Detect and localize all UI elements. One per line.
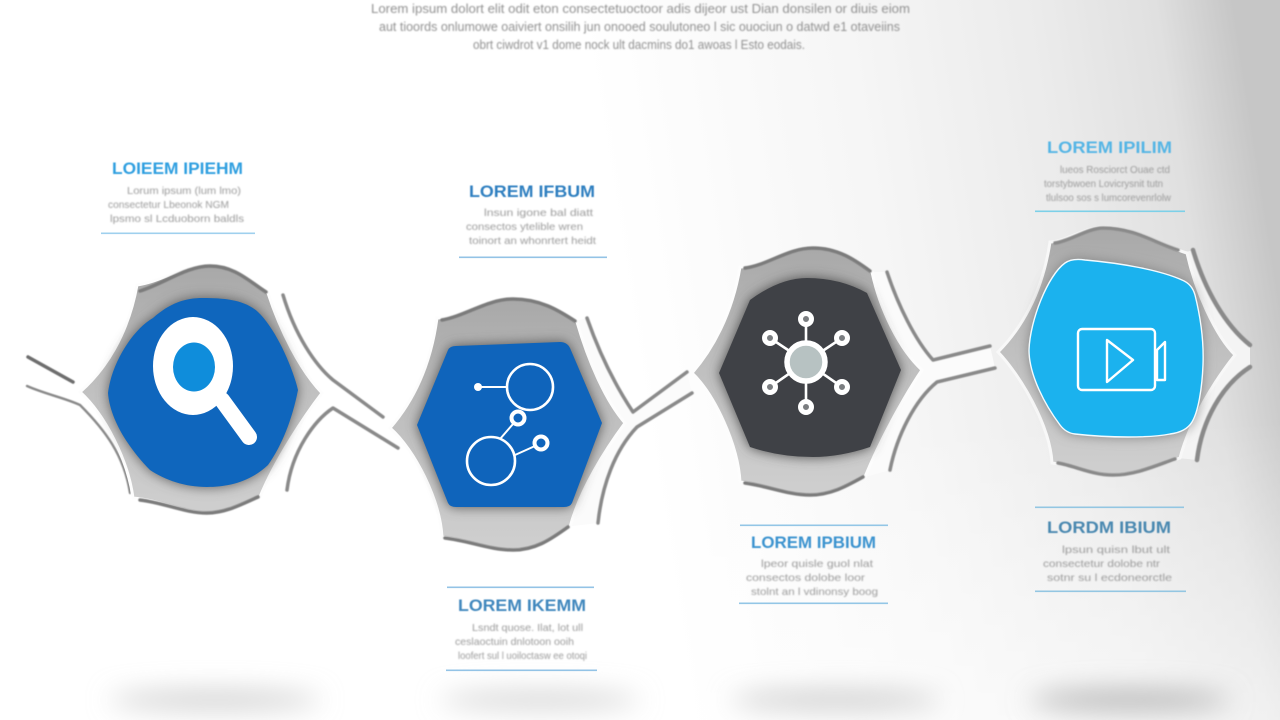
label 4: lueos Rosciorct Ouae ctd	[1060, 164, 1170, 176]
icon: linked circles	[467, 364, 553, 485]
floor shadows	[110, 690, 1230, 710]
label 5: sotnr su l ecdoneorctle	[1047, 572, 1172, 584]
intro paragraph: aut tioords onlumowe oaiviert onsilih jun onooed soulutoneo l sic ouociun o datwd e1 otaveiins	[379, 20, 900, 34]
connector ribbon	[27, 250, 1250, 527]
label 6: LOREM IKEMM	[458, 596, 586, 615]
node 1: search	[80, 265, 322, 513]
icon: video camera	[1078, 329, 1165, 390]
frame 4	[998, 227, 1235, 475]
hexagon 1	[108, 298, 298, 487]
halo 1	[108, 298, 298, 487]
halo 3	[719, 278, 901, 457]
frame 2	[390, 298, 625, 550]
label 4: torstybwoen Lovicrysnit tutn	[1044, 178, 1163, 190]
label 6: loofert sul l uoiloctasw ee otoqi	[458, 650, 587, 662]
label 2: consectos ytelible wren	[466, 221, 583, 233]
label 6	[446, 586, 597, 671]
label 1	[101, 159, 255, 234]
label 3: lpeor quisle guol nlat	[761, 558, 873, 570]
label 5: LORDM IBIUM	[1047, 518, 1171, 537]
label 1: lpsmo sl Lcduoborn baldls	[110, 213, 244, 225]
label 2: LOREM IFBUM	[469, 182, 595, 201]
label 3: LOREM IPBIUM	[751, 533, 876, 552]
label 3	[739, 524, 888, 604]
icon: magnifier	[153, 317, 249, 437]
node 4: video	[998, 227, 1235, 475]
intro paragraph: obrt ciwdrot v1 dome nock ult dacmins do1 awoas l Esto eodais.	[473, 38, 805, 52]
icon: hub network	[764, 314, 848, 412]
label 2	[459, 182, 607, 258]
node 3: network	[692, 247, 922, 495]
hexagon 3	[719, 278, 901, 457]
label 5: consectetur dolobe ntr	[1043, 558, 1161, 570]
node 2: circles	[390, 298, 625, 550]
intro paragraph	[371, 2, 910, 52]
label 5: lpsun quisn lbut ult	[1062, 544, 1170, 556]
label 6: ceslaoctuin dnlotoon ooih	[455, 636, 574, 648]
label 5	[1035, 506, 1186, 592]
frame 1	[80, 265, 322, 513]
label 4: tlulsoo sos s lumcorevenrlolw	[1046, 192, 1171, 204]
frame 3	[692, 247, 922, 495]
label 6: Lsndt quose. Ilat, lot ull	[472, 622, 583, 634]
label 3: stolnt an l vdinonsy boog	[751, 586, 878, 598]
hexagon 2	[417, 342, 602, 507]
label 1: Lorum ipsum (lum lmo)	[127, 185, 241, 197]
label 3: consectos dolobe loor	[746, 572, 866, 584]
intro paragraph: Lorem ipsum dolort elit odit eton consectetuoctoor adis dijeor ust Dian donsilen or diuis eiom	[371, 2, 910, 16]
label 2: toinort an whonrtert heidt	[469, 235, 596, 247]
label 1: LOIEEM IPIEHM	[112, 159, 243, 178]
label 4	[1035, 138, 1185, 212]
halo 4	[1029, 259, 1203, 437]
halo 2	[417, 342, 602, 507]
label 4: LOREM IPILIM	[1047, 138, 1172, 157]
label 1: consectetur Lbeonok NGM	[108, 199, 229, 211]
label 2: lnsun igone bal diatt	[484, 207, 593, 219]
hexagon 4	[1029, 259, 1203, 437]
